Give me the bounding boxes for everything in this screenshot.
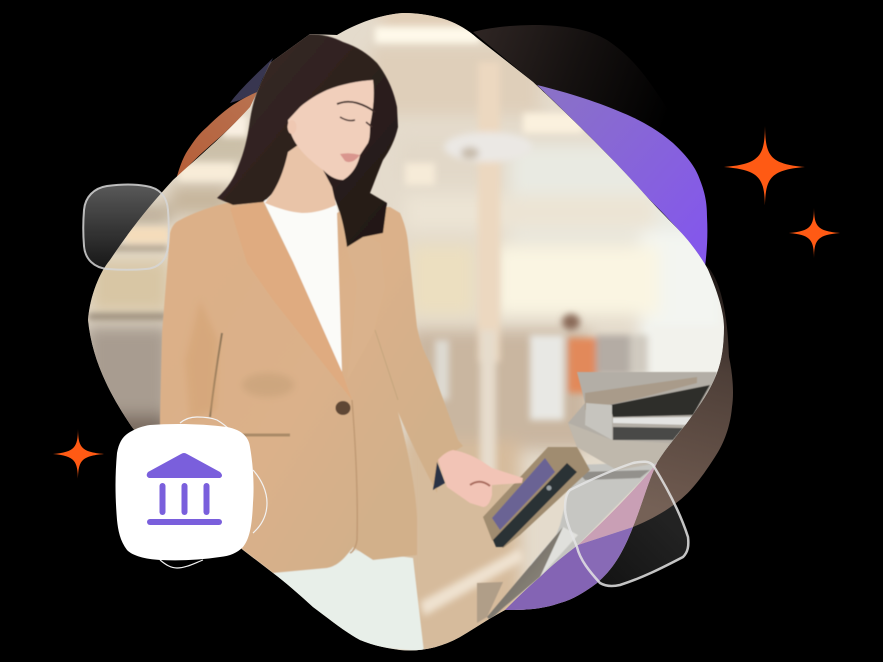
overlay band: purple bbox=[505, 527, 633, 610]
sparkle: large top right bbox=[724, 126, 805, 208]
document cover bbox=[585, 377, 697, 410]
glass frame outline: left bbox=[83, 184, 169, 270]
woman: person group bbox=[160, 34, 523, 652]
lower body bbox=[540, 462, 660, 577]
glass frame fill: lower right bbox=[565, 462, 688, 586]
blurred office background bbox=[80, 0, 740, 660]
background shape: navy band top left bbox=[230, 58, 273, 103]
icon: bank roof bbox=[147, 453, 222, 478]
copier machine bbox=[477, 372, 717, 623]
icon outline: thin white loop behind card bbox=[160, 417, 267, 568]
background shape: orange band top left bbox=[176, 92, 257, 180]
upper housing bbox=[568, 372, 717, 456]
blazer: arm gap bbox=[210, 333, 222, 417]
blazer: left lapel bbox=[258, 238, 350, 396]
icon: bank pillars and base bbox=[147, 483, 222, 525]
sparkle: small top right bbox=[789, 208, 840, 258]
background shape: dark brown fade behind blob bbox=[473, 25, 707, 265]
dark interior bbox=[610, 385, 710, 417]
glass frame fill: left bbox=[83, 184, 169, 270]
woman: face bbox=[288, 80, 374, 180]
woman: hair bbox=[217, 34, 398, 247]
woman: shirt bbox=[263, 200, 357, 378]
blazer: pocket bbox=[240, 434, 290, 436]
overlay band: pink bbox=[578, 463, 657, 545]
copier touch panel bbox=[483, 447, 590, 548]
woman: trousers bbox=[273, 550, 424, 652]
blazer: right lapel bbox=[337, 213, 385, 380]
glass frame outline: lower right bbox=[565, 462, 688, 586]
woman: facial features bbox=[288, 102, 375, 162]
woman: neck bbox=[265, 145, 336, 213]
photo: office scene clipped to blob bbox=[80, 0, 740, 660]
pillar bbox=[487, 527, 563, 620]
lower box bbox=[477, 582, 503, 623]
sparkle: left bbox=[53, 429, 104, 480]
woman: hand pointing at screen bbox=[433, 450, 523, 507]
white strip and buttons bbox=[613, 417, 692, 425]
blazer: front edge and seams bbox=[350, 400, 357, 553]
icon card: bank bbox=[116, 424, 254, 560]
blazer: button bbox=[336, 401, 350, 415]
overlay band: brown right bbox=[633, 265, 733, 527]
background shape: purple band bbox=[537, 85, 707, 267]
woman: blazer bbox=[160, 200, 463, 573]
